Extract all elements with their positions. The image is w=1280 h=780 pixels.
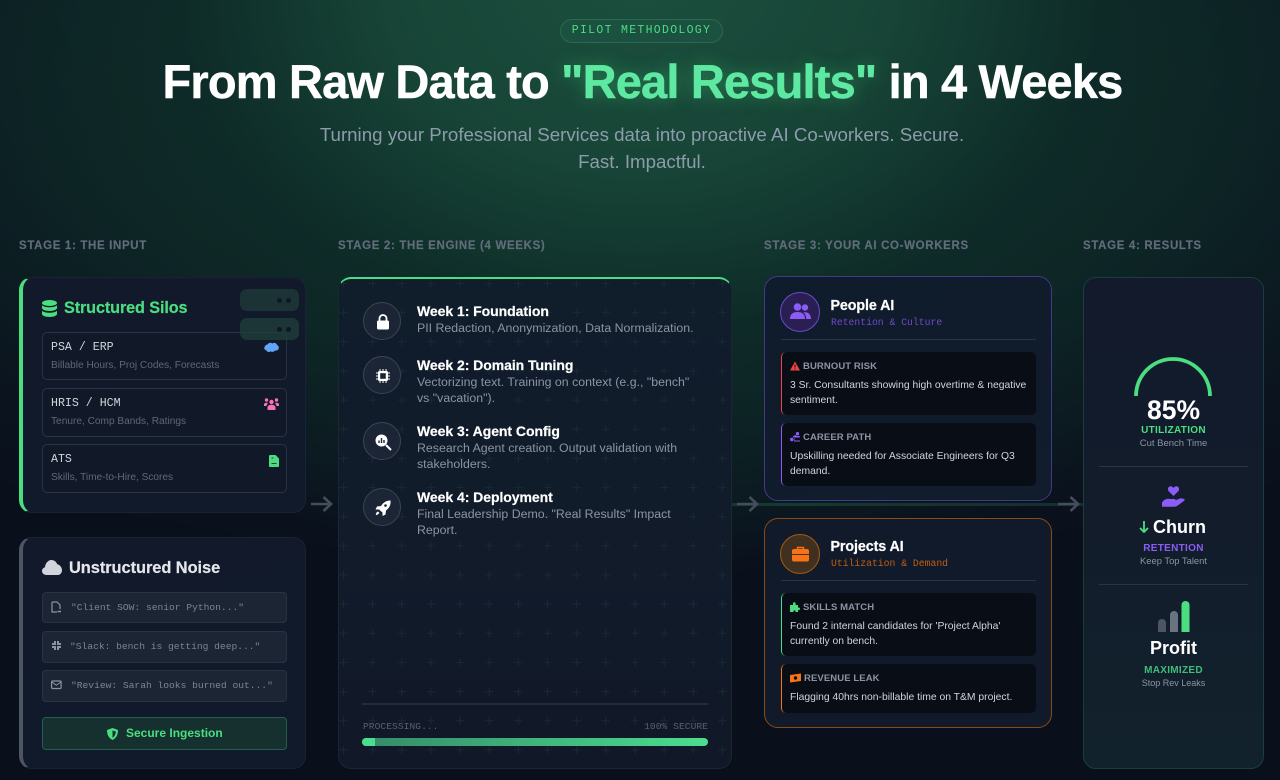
label: processing: PROCESSING...: [363, 721, 438, 732]
subtitle: [320, 124, 964, 172]
insight: career path: demand.: [790, 466, 830, 476]
step icon: search chart: [363, 422, 401, 460]
gauge: [1134, 357, 1212, 396]
week 1 text: [416, 303, 694, 335]
insight: revenue leak: REVENUE LEAK: [804, 673, 880, 684]
label: 100% secure: 100% SECURE: [644, 721, 708, 732]
connector line stage 2 to 4: [732, 503, 1083, 506]
insight: burnout risk: BURNOUT RISK: [803, 361, 877, 372]
metric: churn: Churn: [1153, 517, 1206, 537]
heading: unstructured noise: Unstructured Noise: [69, 559, 220, 577]
stage 2 heading: STAGE 2: THE ENGINE (4 WEEKS): [338, 240, 545, 252]
insight: skills match: [781, 593, 1036, 656]
bars: profit: [1158, 601, 1190, 632]
caption: keep top talent: Keep Top Talent: [1140, 555, 1207, 566]
insight: skills match: SKILLS MATCH: [803, 602, 874, 613]
caption: stop rev leaks: Stop Rev Leaks: [1142, 678, 1205, 688]
week 4 text: Final Leadership Demo. "Real Results" Impact: [417, 507, 671, 521]
heading: projects AI: Projects AI: [830, 539, 904, 555]
insight: revenue leak: Flagging 40hrs non-billable time on T&M project.: [790, 692, 1012, 703]
badge: pilot methodology: [560, 19, 723, 43]
silo: HRIS / HCM: [42, 388, 287, 437]
silo: HRIS / HCM: Tenure, Comp Bands, Ratings: [51, 416, 186, 427]
icon: database: [42, 300, 57, 317]
insight: revenue leak: [781, 664, 1036, 713]
label: retention: RETENTION: [1143, 542, 1204, 554]
divider: [781, 580, 1036, 581]
heading: structured silos: Structured Silos: [64, 299, 187, 317]
card: projects AI: [764, 518, 1052, 728]
silo: PSA / ERP: Billable Hours, Proj Codes, Forecasts: [51, 360, 219, 371]
noise row: slack: "Slack: bench is getting deep...": [70, 641, 260, 652]
arrow: input to engine: [311, 496, 333, 512]
week 4 text: [416, 489, 671, 537]
subheading: retention and culture: Retention & Culture: [831, 317, 942, 328]
noise row: review email: "Review: Sarah looks burned out...": [71, 680, 273, 691]
metric: profit: Profit: [1150, 638, 1197, 658]
badge: pilot methodology: PILOT METHODOLOGY: [572, 24, 711, 37]
secure ingestion button: Secure Ingestion: [126, 726, 223, 740]
decorative pill overlapping: [240, 318, 299, 340]
insight: career path: CAREER PATH: [803, 432, 871, 443]
panel: unstructured noise: [19, 537, 306, 769]
week 2 text: vs "vacation").: [417, 391, 495, 405]
divider: [1099, 584, 1248, 585]
silo: ATS: Skills, Time-to-Hire, Scores: [51, 472, 173, 483]
step icon: rocket: [363, 488, 401, 526]
secure ingestion button: [42, 717, 287, 750]
label: utilization: UTILIZATION: [1141, 424, 1206, 436]
icon: hand holding heart: [1162, 486, 1185, 507]
divider: [1099, 466, 1248, 467]
week 1 text: Week 1: Foundation: [417, 303, 549, 319]
caption: cut bench time: Cut Bench Time: [1140, 438, 1207, 449]
step icon: lock: [363, 302, 401, 340]
silo: HRIS / HCM: HRIS / HCM: [51, 397, 121, 410]
week 1 text: PII Redaction, Anonymization, Data Normalization.: [417, 321, 694, 335]
arrow: engine to co-workers: [737, 496, 759, 512]
week 2 text: [416, 357, 689, 405]
divider: [781, 339, 1036, 340]
title: From Raw Data to "Real Results" in 4 Weeks: [162, 55, 1122, 108]
silo: ATS: [42, 444, 287, 493]
insight: burnout risk: 3 Sr. Consultants showing high overtime & negative: [790, 380, 1026, 391]
silo: PSA / ERP: [42, 332, 287, 380]
progress block: [362, 703, 708, 746]
insight: skills match: currently on bench.: [790, 636, 878, 646]
insight: career path: [781, 423, 1036, 486]
noise row: review email: [42, 670, 287, 702]
stage 1 heading: STAGE 1: THE INPUT: [19, 240, 147, 252]
panel: engine: [338, 277, 732, 769]
icon: people: [780, 292, 820, 332]
step icon: chip: [363, 356, 401, 394]
insight: career path: Upskilling needed for Associate Engineers for Q3: [790, 451, 1015, 462]
panel: structured silos: [19, 277, 306, 513]
noise row: slack: [42, 631, 287, 663]
stage 4 heading: STAGE 4: RESULTS: [1083, 240, 1202, 252]
week 3 text: Week 3: Agent Config: [417, 423, 560, 439]
label: maximized: MAXIMIZED: [1144, 664, 1203, 676]
panel: results: [1083, 277, 1264, 769]
week 3 text: [416, 423, 677, 471]
week 2 text: Week 2: Domain Tuning: [417, 357, 573, 373]
week 3 text: stakeholders.: [417, 457, 490, 471]
noise row: client SOW: [42, 592, 287, 623]
week 2 text: Vectorizing text. Training on context (e.g., "bench": [417, 375, 689, 389]
metric: 85%: 85%: [1147, 395, 1200, 425]
week 4 text: Week 4: Deployment: [417, 489, 553, 505]
week 3 text: Research Agent creation. Output validation with: [417, 441, 677, 455]
week 4 text: Report.: [417, 523, 457, 537]
insight: burnout risk: sentiment.: [790, 394, 838, 406]
card: people AI: [764, 276, 1052, 501]
insight: skills match: Found 2 internal candidates for 'Project Alpha': [790, 621, 1000, 632]
icon: cloud: [42, 560, 62, 575]
insight: burnout risk: [781, 352, 1036, 415]
icon: briefcase: [780, 534, 820, 574]
stage 3 heading: STAGE 3: YOUR AI CO-WORKERS: [764, 240, 969, 252]
noise row: client SOW: "Client SOW: senior Python...": [71, 602, 244, 613]
subtitle: Turning your Professional Services data into proactive AI Co-workers. Secure.: [320, 124, 964, 145]
progress bar: [362, 738, 708, 746]
heading: people AI: People AI: [830, 298, 894, 314]
silo: ATS: ATS: [51, 453, 72, 466]
decorative pill top: [240, 289, 299, 311]
subtitle: Fast. Impactful.: [578, 151, 706, 172]
silo: PSA / ERP: PSA / ERP: [51, 341, 114, 354]
subheading: utilization and demand: Utilization & Demand: [831, 558, 948, 569]
arrow: co-workers to results: [1058, 496, 1080, 512]
